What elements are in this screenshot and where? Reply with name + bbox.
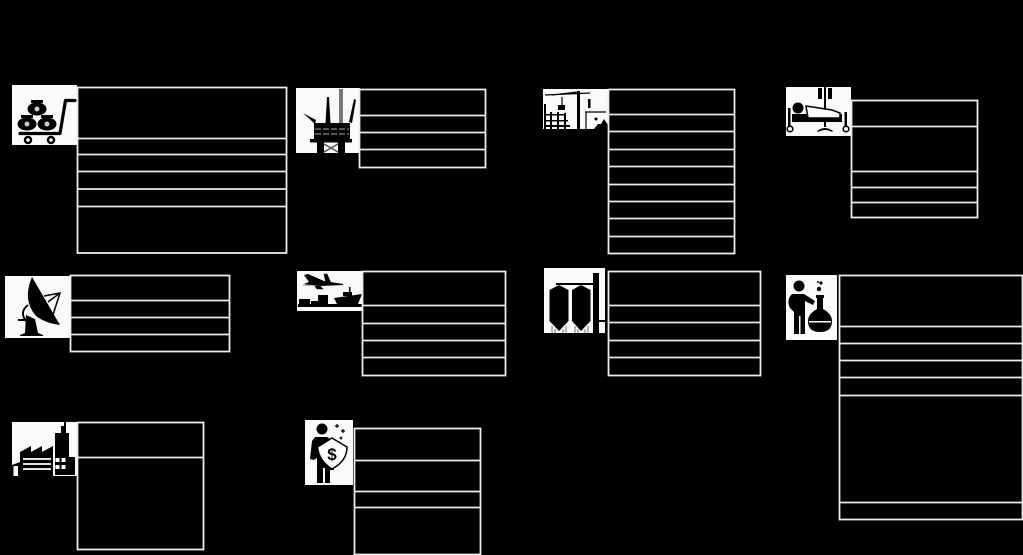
table	[360, 90, 486, 168]
panel: health care	[786, 87, 978, 218]
icon: cranes	[543, 89, 608, 131]
panel: communications	[5, 276, 230, 352]
table	[608, 90, 734, 254]
table	[608, 272, 760, 376]
icon: person with shield: $	[327, 445, 337, 464]
panel: science	[786, 275, 1022, 520]
panel: finance	[12, 85, 286, 253]
icon: factory	[12, 422, 77, 476]
table	[840, 276, 1022, 520]
icon: grain silos	[544, 268, 605, 333]
table	[70, 276, 230, 352]
panel: manufacturing	[12, 422, 204, 550]
icon: person with flask	[786, 275, 837, 340]
table	[852, 100, 978, 218]
icon: hospital bed	[786, 87, 851, 136]
icon: plane truck ship	[297, 271, 362, 311]
panel: insurance	[305, 420, 480, 554]
icon: satellite dish	[5, 276, 70, 338]
table	[354, 428, 480, 554]
table	[78, 422, 204, 550]
table	[78, 88, 286, 253]
icon: person with shield	[305, 420, 353, 485]
panel: transportation	[297, 271, 506, 376]
icon: money bags on cart	[12, 85, 77, 145]
panel: construction	[543, 89, 734, 254]
panel: agriculture	[544, 268, 760, 376]
panel: oil and gas	[296, 88, 486, 168]
table	[362, 272, 506, 376]
icon: oil platform	[296, 88, 360, 153]
